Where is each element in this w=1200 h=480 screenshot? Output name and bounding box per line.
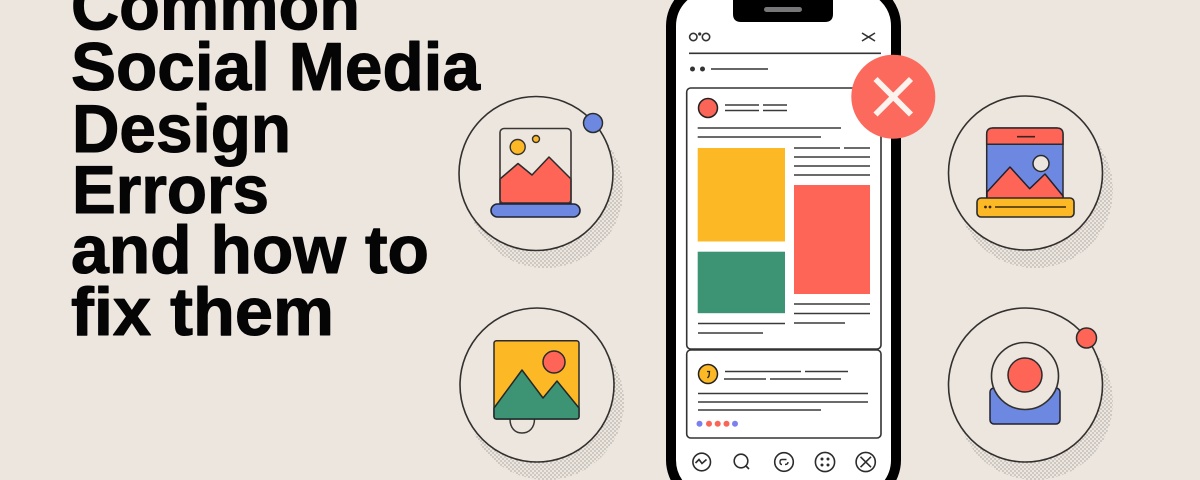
yellow image block [698, 148, 785, 242]
icon badge: image on blue base (top left) [459, 96, 623, 268]
post card one [687, 88, 881, 349]
phone notch [733, 0, 833, 22]
coloured dots [696, 421, 738, 427]
red image block [794, 185, 870, 294]
icon badge: app window picture (top right) [948, 96, 1113, 268]
icon badge: camera lens (bottom right) [948, 308, 1113, 480]
phone mockup [671, 0, 935, 480]
post card two [687, 350, 881, 438]
bottom navigation icons [693, 452, 875, 472]
green image block [698, 252, 785, 313]
icon badge: yellow landscape picture (bottom left) [460, 308, 624, 480]
title [71, 0, 481, 350]
error badge: red cross [851, 55, 935, 139]
app header [689, 33, 881, 72]
post text lines [698, 105, 870, 333]
title: Design [72, 91, 291, 167]
second post text lines [698, 372, 868, 410]
second avatar [698, 364, 718, 384]
title: Errors [72, 152, 269, 228]
title: Social Media [71, 29, 481, 105]
title: fix them [71, 274, 334, 350]
title: and how to [71, 212, 429, 288]
post avatar [698, 98, 718, 118]
phone body [671, 0, 896, 480]
